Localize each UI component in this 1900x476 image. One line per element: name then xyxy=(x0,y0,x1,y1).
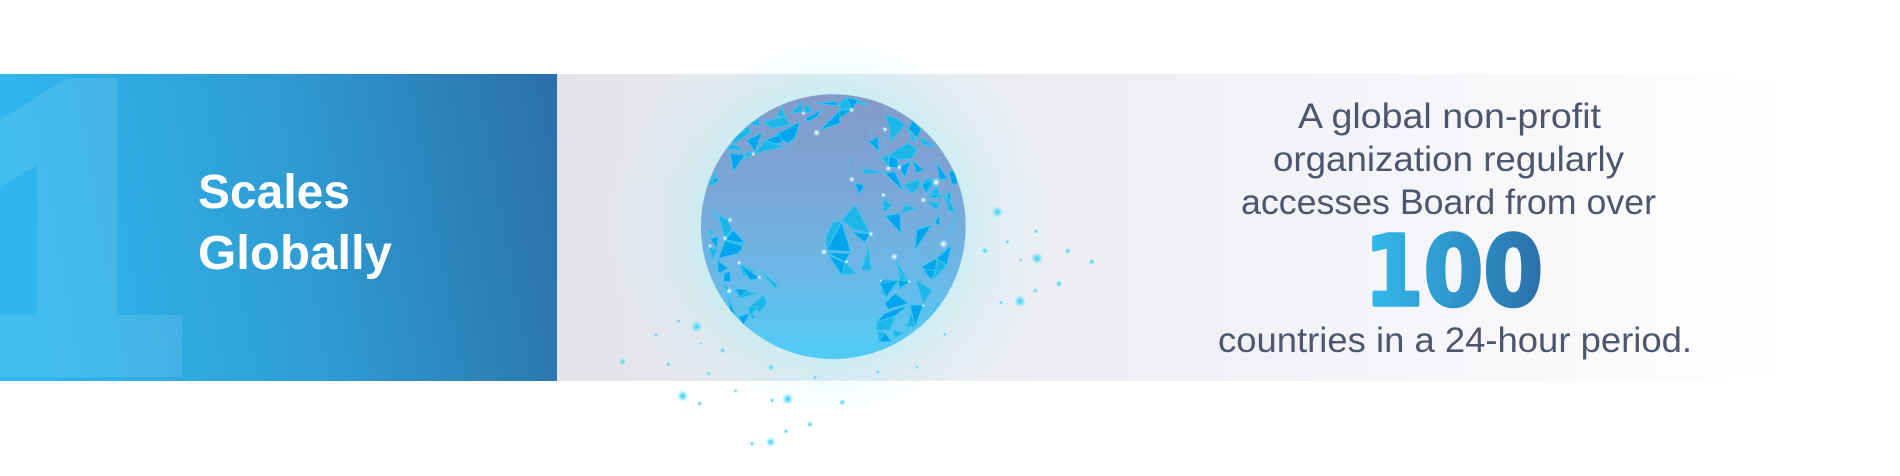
continents xyxy=(708,97,957,342)
globe glow xyxy=(659,62,1012,392)
background band xyxy=(557,74,1900,381)
heading: Scales xyxy=(198,166,350,219)
globe xyxy=(701,94,966,359)
text block: description: accesses Board from over xyxy=(1241,183,1656,222)
text block: description: countries in a 24-hour period. xyxy=(1218,321,1692,360)
particles xyxy=(619,206,1095,447)
text block: description xyxy=(1218,97,1692,360)
big number 100: 100 xyxy=(1364,215,1543,328)
panel: scales globally xyxy=(0,74,557,381)
network nodes xyxy=(708,107,948,307)
heading: Globally xyxy=(198,227,392,280)
watermark numeral 1 xyxy=(0,78,182,377)
text block: description: organization regularly xyxy=(1273,140,1625,179)
heading xyxy=(198,166,392,280)
text block: description: A global non-profit xyxy=(1298,97,1601,136)
infographic xyxy=(0,62,1689,446)
